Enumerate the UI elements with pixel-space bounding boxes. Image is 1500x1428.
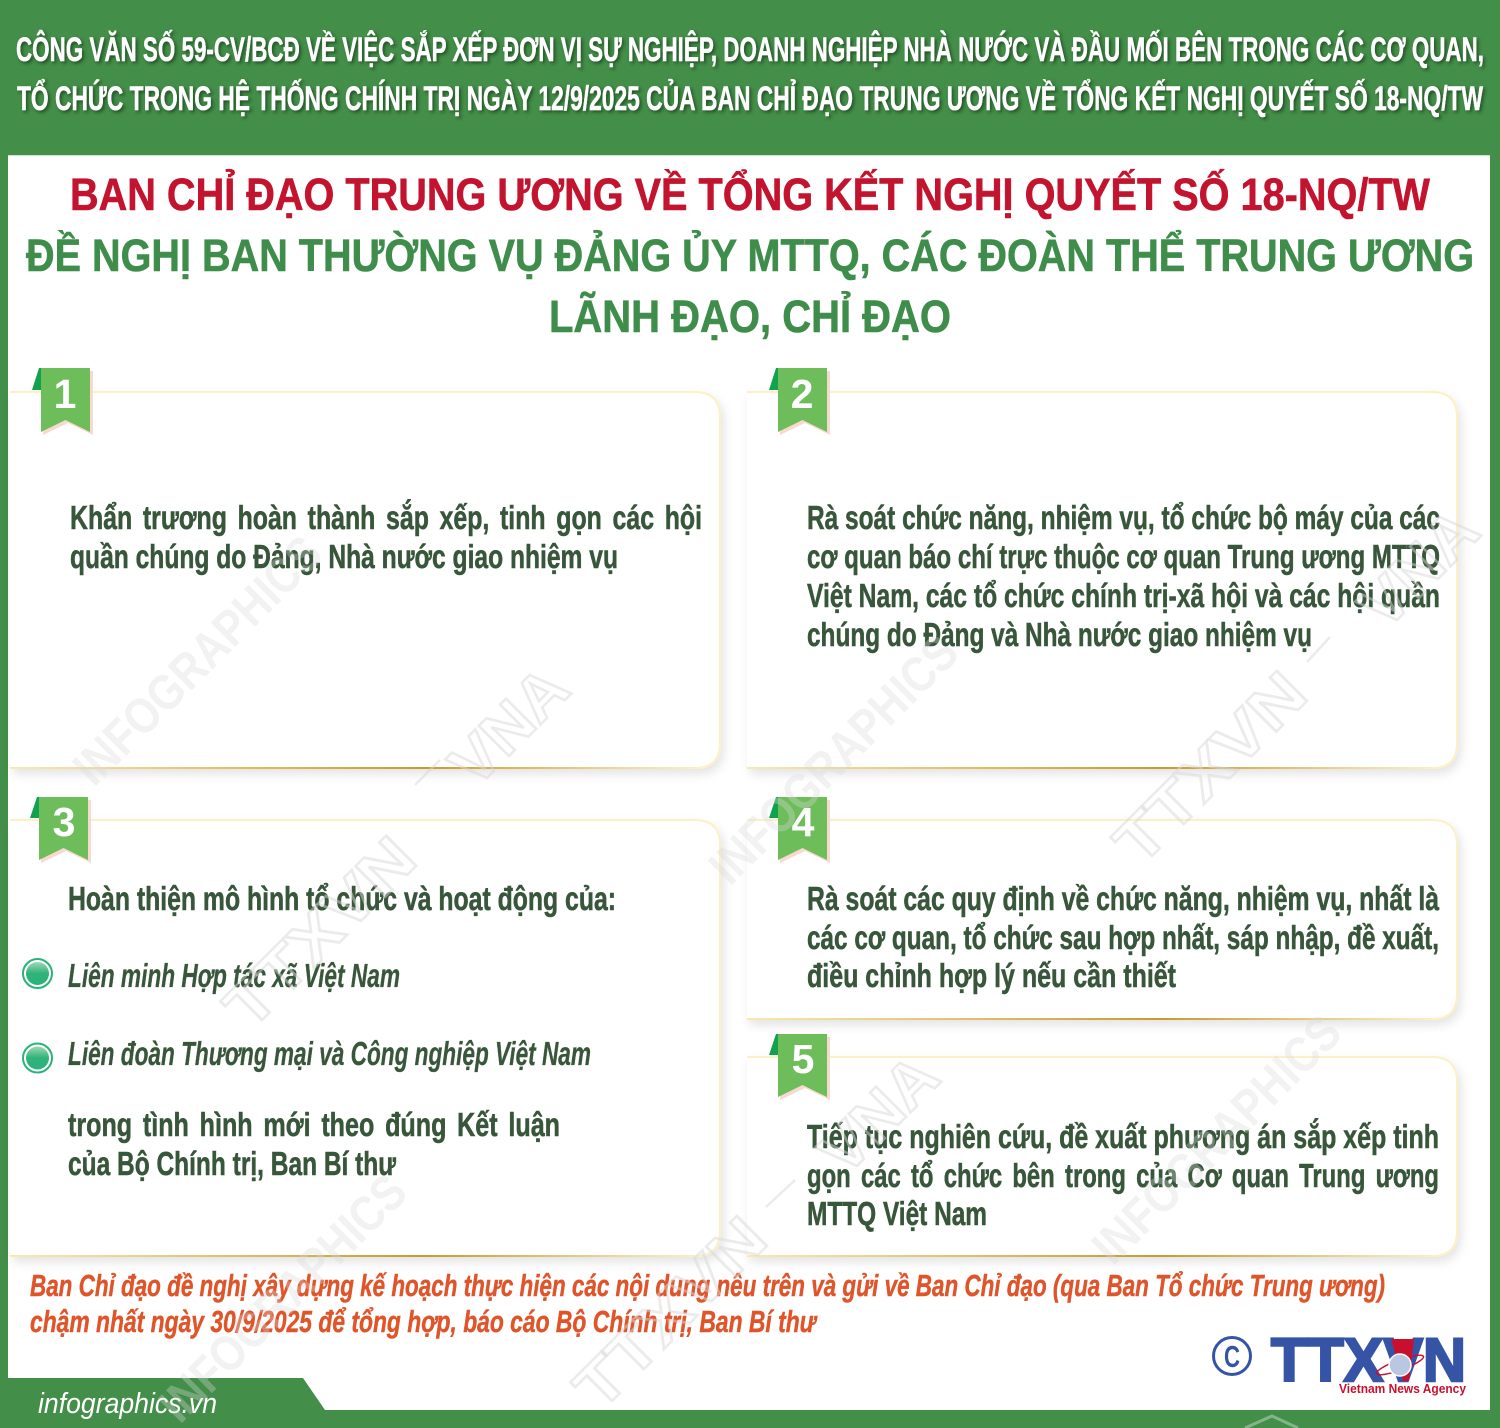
bullet 2 <box>23 1044 52 1072</box>
callout: deadline note <box>30 1268 1385 1339</box>
bullet 1 <box>23 959 52 988</box>
card 2 text <box>807 499 1440 653</box>
watermarks: VNA <box>1346 496 1492 642</box>
watermarks: INFOGRAPHICS <box>62 525 333 796</box>
card 3 closing text: của Bộ Chính trị, Ban Bí thư <box>68 1145 396 1182</box>
green heading: LÃNH ĐẠO, CHỈ ĐẠO <box>549 291 951 342</box>
badge 4 <box>769 797 830 863</box>
card 5 text <box>807 1118 1439 1232</box>
badge 3: 3 <box>53 799 75 845</box>
panel: card 5 <box>747 1034 1457 1257</box>
badge 2 <box>769 368 830 435</box>
badge 5 <box>769 1034 830 1100</box>
logo: TTXVN: Vietnam News Agency <box>1339 1382 1466 1396</box>
panel: card 1 <box>10 368 720 769</box>
card 3 intro: Hoàn thiện mô hình tổ chức và hoạt động của: <box>68 880 616 917</box>
site name: infographics.vn <box>38 1388 217 1420</box>
card 1 text: quần chúng do Đảng, Nhà nước giao nhiệm vụ <box>70 538 618 575</box>
badge 2: 2 <box>791 371 813 417</box>
logo: TTXVN: TTXVN <box>1271 1326 1466 1394</box>
list item 2: Liên đoàn Thương mại và Công nghiệp Việt Nam <box>68 1035 591 1072</box>
card 4 text <box>807 880 1439 994</box>
badge 1 <box>32 368 93 435</box>
panel: card 4 <box>747 797 1457 1020</box>
watermarks: TTXVN <box>1101 659 1320 878</box>
list item 1: Liên minh Hợp tác xã Việt Nam <box>68 957 400 994</box>
watermarks: INFOGRAPHICS <box>1081 1004 1352 1275</box>
card 4 text: điều chỉnh hợp lý nếu cần thiết <box>807 957 1176 994</box>
badge 1: 1 <box>54 371 76 417</box>
watermarks: TTXVN <box>561 1204 780 1423</box>
watermarks <box>62 496 1492 1428</box>
card 3 closing text: trong tình hình mới theo đúng Kết luận <box>68 1106 560 1143</box>
panel: card 3 <box>10 797 720 1257</box>
badge 5: 5 <box>792 1036 814 1082</box>
card 1 text: Khẩn trương hoàn thành sắp xếp, tinh gọn các hội <box>70 499 702 536</box>
badge 4: 4 <box>792 799 815 845</box>
footer tab <box>0 1378 325 1428</box>
card 3 closing text <box>68 1106 560 1182</box>
watermarks: VNA <box>806 1042 952 1188</box>
panel: card 2 <box>747 368 1457 769</box>
watermarks: VNA <box>436 654 582 800</box>
logo: TTXVN: C <box>1224 1339 1240 1374</box>
green heading <box>26 230 1474 342</box>
header text <box>16 30 1484 118</box>
title <box>8 30 1490 342</box>
watermarks: INFOGRAPHICS <box>148 1163 418 1428</box>
badge 3 <box>30 797 91 863</box>
callout: deadline note: chậm nhất ngày 30/9/2025 để tổng hợp, báo cáo Bộ Chính trị, Ban Bí thư <box>30 1304 818 1339</box>
card 1 text <box>70 499 702 575</box>
watermarks: TTXVN <box>211 823 430 1042</box>
card 5 text: MTTQ Việt Nam <box>807 1195 987 1232</box>
card 2 text: chúng do Đảng và Nhà nước giao nhiệm vụ <box>807 616 1312 653</box>
watermarks: INFOGRAPHICS <box>698 624 969 895</box>
